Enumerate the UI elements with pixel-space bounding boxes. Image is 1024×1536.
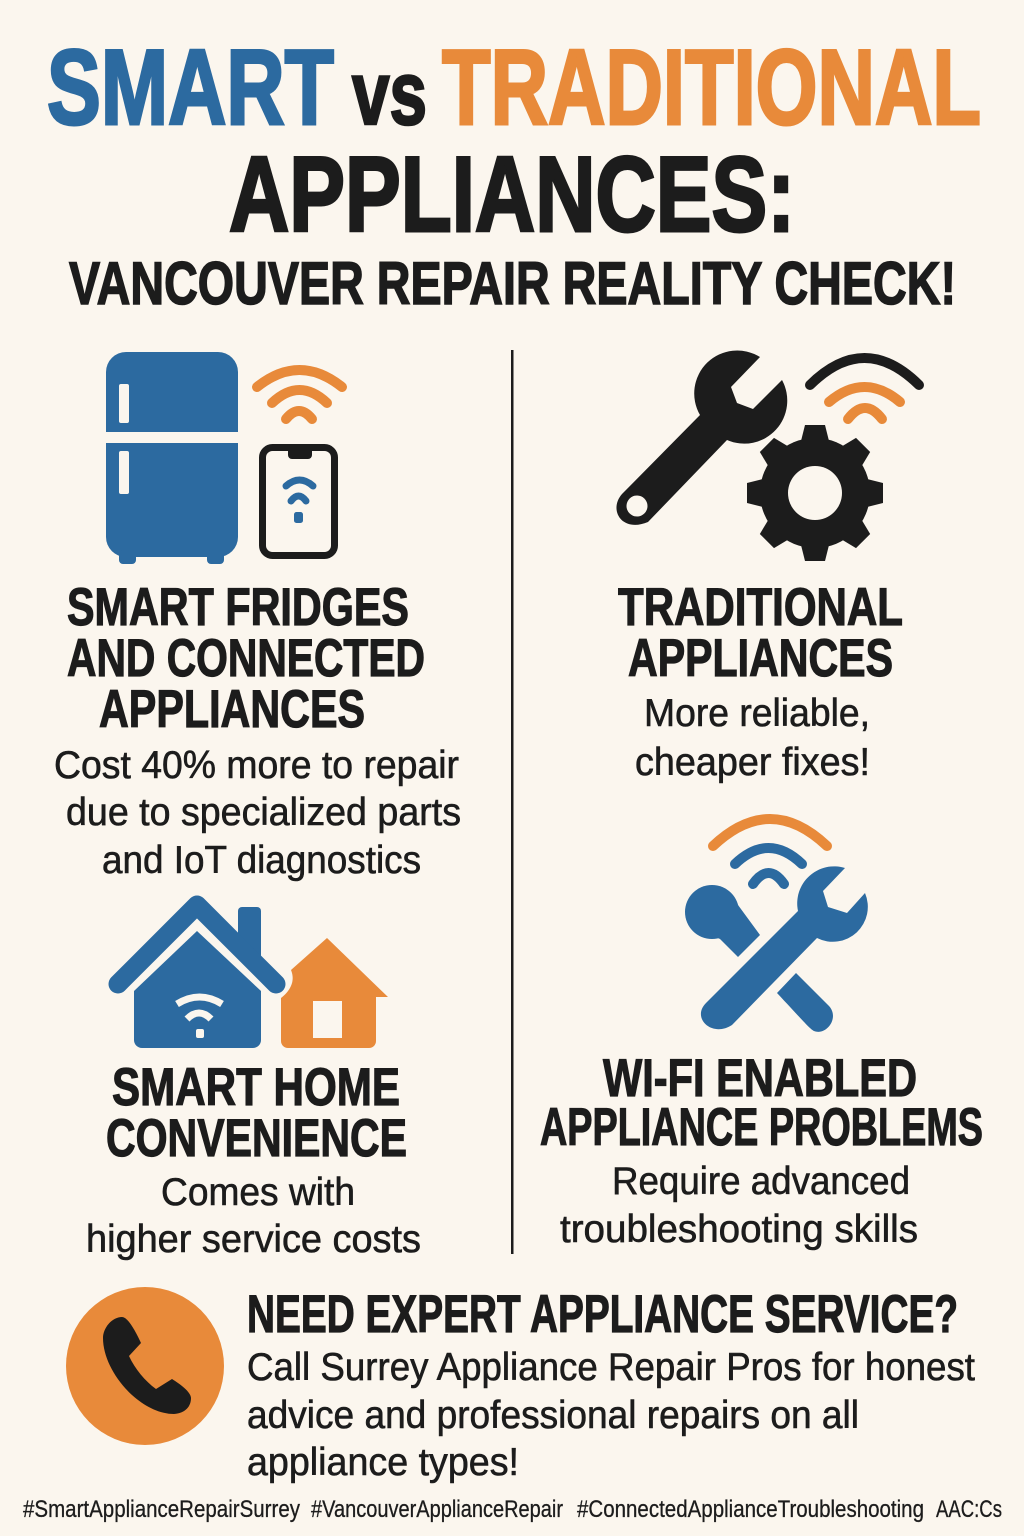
icon: smart home and small house xyxy=(118,905,388,1048)
heading: smart fridges: APPLIANCES xyxy=(99,680,365,739)
heading: smart fridges xyxy=(67,578,425,739)
icon: crossed tools with wifi xyxy=(685,819,868,1032)
callout text xyxy=(247,1346,975,1484)
hashtags footer: #VancouverApplianceRepair xyxy=(311,1496,563,1523)
icon: phone in orange circle xyxy=(66,1287,224,1445)
wifi signal black and orange xyxy=(810,358,919,419)
text: wi-fi description: Require advanced xyxy=(612,1160,910,1203)
heading: wi-fi problems: WI-FI ENABLED xyxy=(603,1049,917,1108)
title line: APPLIANCES: APPLIANCES: xyxy=(229,134,795,254)
callout text: Call Surrey Appliance Repair Pros for honest xyxy=(247,1346,975,1389)
text: traditional description: cheaper fixes! xyxy=(635,741,870,784)
icon: smart fridge with phone and wifi xyxy=(106,352,342,564)
hashtags footer: #ConnectedApplianceTroubleshooting xyxy=(577,1496,924,1523)
text: smart home description: Comes with xyxy=(161,1171,355,1214)
title word: SMART: SMART xyxy=(47,27,334,147)
text: smart home description xyxy=(86,1171,421,1261)
wrench xyxy=(616,350,787,525)
text: traditional description: More reliable, xyxy=(644,692,870,735)
text: traditional description xyxy=(635,692,870,784)
text: smart fridge description: due to specialized parts xyxy=(66,791,461,834)
text: wi-fi description: troubleshooting skills xyxy=(560,1208,918,1251)
phone xyxy=(262,448,334,556)
text: smart fridge description: Cost 40% more to repair xyxy=(54,744,459,787)
wifi signal xyxy=(713,819,827,884)
text: smart fridge description xyxy=(54,744,461,882)
heading: smart home: SMART HOME xyxy=(112,1058,400,1117)
title word: vs: vs xyxy=(352,44,427,144)
spoon xyxy=(685,885,833,1032)
heading: traditional appliances: APPLIANCES xyxy=(628,629,893,688)
heading: wi-fi problems xyxy=(540,1049,983,1157)
text: smart home description: higher service costs xyxy=(86,1218,421,1261)
heading: smart home xyxy=(106,1058,407,1168)
orange house xyxy=(281,938,388,1048)
fridge xyxy=(106,352,238,564)
title xyxy=(47,27,981,317)
icon: wrench, gear and wifi xyxy=(616,350,919,561)
hashtags footer: AAC:Cs xyxy=(936,1496,1002,1523)
heading: smart home: CONVENIENCE xyxy=(106,1109,407,1168)
wifi signal orange xyxy=(257,370,342,419)
heading: smart fridges: AND CONNECTED xyxy=(67,629,425,688)
heading: smart fridges: SMART FRIDGES xyxy=(67,578,409,637)
hashtags footer xyxy=(23,1496,1002,1523)
text: smart fridge description: and IoT diagnostics xyxy=(102,839,421,882)
blue house xyxy=(118,905,276,1048)
heading: traditional appliances xyxy=(618,578,903,688)
callout text: advice and professional repairs on all xyxy=(247,1394,859,1437)
text: wi-fi description xyxy=(560,1160,918,1251)
gear xyxy=(747,425,883,561)
callout text: appliance types! xyxy=(247,1441,519,1484)
heading: traditional appliances: TRADITIONAL xyxy=(618,578,903,637)
blue wrench xyxy=(701,866,868,1029)
hashtags footer: #SmartApplianceRepairSurrey xyxy=(23,1496,301,1523)
center divider xyxy=(511,350,514,1254)
